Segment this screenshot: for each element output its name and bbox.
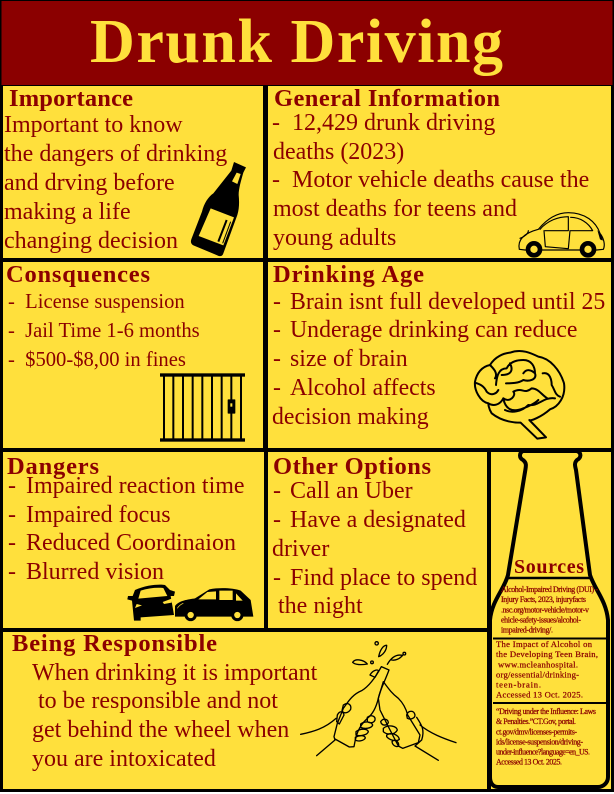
- text: drinking age list: -: [273, 317, 281, 343]
- text: being responsible body: get behind the wheel when: [32, 717, 289, 743]
- source 2: teen-brain.: [496, 680, 541, 690]
- text: other options list: the night: [278, 593, 363, 619]
- icon: small car: [519, 213, 604, 255]
- heading: drinking age: Drinking Age: [273, 261, 424, 288]
- text: consequences list: - Jail Time 1-6 months: [8, 320, 200, 342]
- text: general information body: deaths (2023): [273, 139, 404, 165]
- title banner: Drunk Driving: [90, 8, 503, 76]
- text: drinking age list: Underage drinking can reduce: [290, 317, 577, 343]
- text: other options list: -: [273, 507, 281, 533]
- source 3: under-influence?language=en_US.: [496, 748, 590, 756]
- text: drinking age list: decision making: [272, 404, 429, 430]
- text: general information body: young adults: [273, 225, 396, 251]
- source 3: “Driving under the Influence: Laws: [496, 707, 596, 716]
- text: dangers list: -: [8, 502, 16, 528]
- text: consequences list: - License suspension: [8, 291, 185, 313]
- text: other options list: [272, 478, 477, 619]
- source 3: [496, 707, 596, 766]
- icon: clinking bottles: [301, 642, 456, 760]
- heading: other options: Other Options: [273, 453, 431, 480]
- text: importance body: [4, 112, 227, 254]
- text: other options list: driver: [272, 536, 329, 562]
- panel: other options: [268, 452, 487, 628]
- heading: dangers: Dangers: [7, 453, 99, 480]
- text: general information body: - Motor vehicle deaths cause the: [272, 167, 589, 193]
- text: consequences list: - $500-$8,00 in fines: [8, 349, 186, 371]
- text: general information body: - 12,429 drunk driving: [272, 110, 495, 136]
- panel: sources bottle: [490, 451, 611, 789]
- panel: drinking age: [268, 261, 611, 448]
- heading: general information: General Information: [274, 85, 500, 112]
- text: dangers list: -: [8, 473, 16, 499]
- source 2: [496, 639, 598, 700]
- icon: jail bars: [160, 373, 245, 442]
- source 3: ids/license-suspension/driving-: [496, 738, 583, 746]
- panel: being responsible: [3, 630, 487, 789]
- text: dangers list: Impaired focus: [26, 502, 171, 528]
- text: drinking age list: size of brain: [290, 346, 408, 372]
- source 1: ehicle-safety-issues/alcohol-: [501, 616, 581, 624]
- source 2: The Impact of Alcohol on: [496, 639, 593, 649]
- source 2: www.mcleanhospital.: [498, 660, 578, 670]
- icon: beer bottle: [191, 162, 246, 256]
- heading: importance: Importance: [9, 85, 133, 112]
- icon: crashed cars: [127, 585, 253, 621]
- text: drinking age list: Brain isnt full developed until 25: [290, 289, 605, 315]
- bottle outline: [490, 451, 608, 787]
- text: dangers list: Blurred vision: [26, 559, 164, 585]
- text: drinking age list: -: [273, 289, 281, 315]
- heading: being responsible: Being Responsible: [12, 630, 217, 657]
- text: being responsible body: When drinking it is important: [32, 660, 318, 686]
- text: other options list: Call an Uber: [290, 478, 413, 504]
- title banner: [2, 1, 612, 85]
- panel: importance: [3, 85, 263, 258]
- text: dangers list: -: [8, 559, 16, 585]
- source 2: org/essential/drinking-: [496, 670, 579, 680]
- source 1: .nsc.org/motor-vehicle/motor-v: [501, 606, 589, 614]
- text: other options list: Have a designated: [290, 507, 466, 533]
- source 1: [501, 585, 598, 634]
- source 3: Accessed 13 Oct. 2025.: [496, 758, 562, 766]
- text: importance body: and drving before: [4, 170, 175, 196]
- text: being responsible body: you are intoxicated: [32, 746, 216, 772]
- text: importance body: Important to know: [4, 112, 183, 138]
- panel: general information: [268, 85, 611, 258]
- heading: consequences: Consquences: [6, 261, 150, 288]
- text: being responsible body: [32, 660, 318, 772]
- source 1: impaired-driving/.: [501, 626, 553, 634]
- text: being responsible body: to be responsible and not: [38, 688, 278, 714]
- source 2: Accessed 13 Oct. 2025.: [496, 690, 583, 700]
- text: importance body: making a life: [4, 199, 131, 225]
- source 3: & Penalties.”CT.Gov, portal.: [496, 717, 576, 726]
- text: other options list: Find place to spend: [290, 565, 477, 591]
- text: dangers list: Reduced Coordinaion: [26, 530, 236, 556]
- text: importance body: the dangers of drinking: [4, 141, 227, 167]
- text: general information body: [272, 110, 589, 251]
- text: dangers list: -: [8, 530, 16, 556]
- text: consequences list: [8, 291, 200, 371]
- source 1: Alcohol-Impaired Driving (DUI) -: [501, 585, 598, 594]
- text: dangers list: [8, 473, 245, 585]
- icon: brain: [475, 351, 564, 439]
- text: drinking age list: [272, 289, 605, 430]
- text: importance body: changing decision: [4, 228, 178, 254]
- source 1: Injury Facts, 2023, injuryfacts: [501, 595, 586, 604]
- text: drinking age list: -: [273, 346, 281, 372]
- panel: dangers: [3, 452, 264, 628]
- text: drinking age list: Alcohol affects: [290, 375, 436, 401]
- panel: consequences: [3, 261, 263, 448]
- heading: sources: Sources: [514, 556, 584, 578]
- text: other options list: -: [273, 478, 281, 504]
- text: general information body: most deaths for teens and: [273, 196, 517, 222]
- text: drinking age list: -: [273, 375, 281, 401]
- text: other options list: -: [273, 565, 281, 591]
- source 3: ct.gov/dmv/licenses-permits-: [496, 728, 577, 736]
- text: dangers list: Impaired reaction time: [26, 473, 245, 499]
- source 2: the Developing Teen Brain,: [496, 649, 598, 659]
